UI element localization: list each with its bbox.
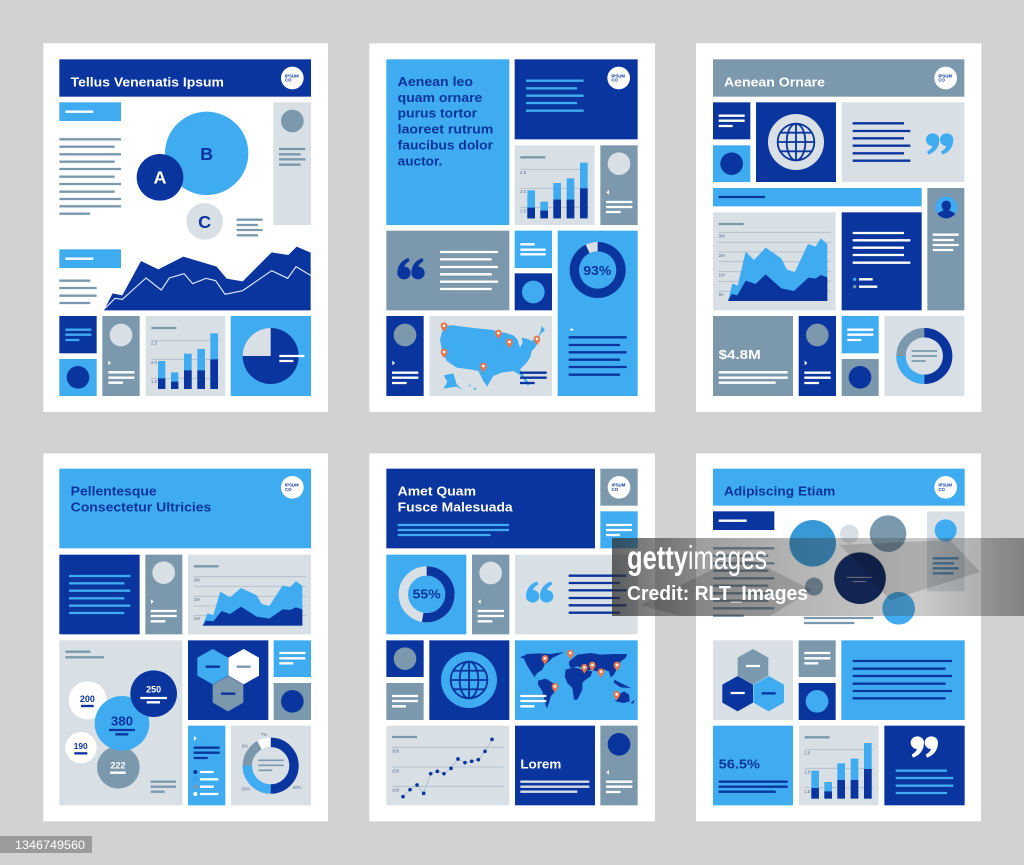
area chart: 3M: [719, 233, 725, 238]
header: CO: [938, 487, 945, 492]
text block: [59, 139, 121, 214]
image id badge: 1346749560: [15, 840, 85, 852]
area chart: [713, 212, 836, 310]
label bar: [713, 511, 774, 530]
bubble chart A B C: C: [198, 212, 211, 232]
headline panel: quam ornare: [398, 90, 482, 105]
bar chart: 1.5: [804, 789, 811, 794]
page 5: Amet Quam: [369, 453, 655, 821]
caption: [59, 281, 97, 303]
bubble chart: 250: [146, 684, 161, 694]
header: [59, 59, 311, 97]
page 1: Tellus Venenatis Ipsum: [43, 43, 328, 412]
bubble chart: [59, 640, 182, 805]
navy text panel with logo: CO: [611, 78, 618, 83]
header: CO: [285, 487, 292, 492]
headline panel: purus tortor: [398, 106, 477, 121]
bubble chart A B C: [137, 112, 248, 240]
donut panel: [884, 316, 964, 396]
note tile: [799, 640, 836, 677]
quote panel: [884, 726, 965, 805]
navy text panel with logo: [515, 59, 638, 139]
bubble chart: 222: [110, 761, 125, 771]
page sheet: [696, 43, 981, 412]
area chart: 1M: [194, 616, 200, 621]
donut panel 55%: 55%: [413, 588, 441, 602]
note tile: [713, 102, 750, 139]
header: Consectetur Ultricies: [71, 500, 211, 515]
header: IPSUM: [285, 483, 299, 488]
Lorem stat card: Lorem: [520, 756, 561, 771]
page sheet: [369, 43, 655, 412]
note tile: [600, 511, 638, 548]
header: IPSUM: [285, 73, 299, 78]
headline panel: Aenean leo: [398, 74, 473, 89]
area chart: 2M: [719, 253, 725, 258]
header: [386, 469, 595, 548]
header: CO: [285, 78, 292, 83]
bar chart: 2.0: [804, 770, 811, 775]
note tile: [386, 683, 424, 720]
label bar: [713, 188, 922, 206]
icon: globe: [756, 102, 836, 182]
dot line chart: [386, 726, 509, 805]
circle tile: [59, 359, 97, 396]
page sheet: [696, 453, 981, 821]
side panel: [927, 511, 965, 591]
header: IPSUM: [938, 73, 952, 78]
header: Tellus Venenatis Ipsum: [71, 75, 224, 90]
text block: [713, 548, 774, 616]
bar chart: [515, 145, 595, 225]
caption: [804, 618, 873, 623]
logo tile: IPSUM: [612, 483, 626, 488]
stat card $4.8M: $4.8M: [719, 347, 761, 362]
donut chart: [231, 726, 311, 805]
profile card: [600, 726, 638, 805]
navy text panel with legend: [842, 212, 922, 310]
header: Aenean Ornare: [724, 75, 825, 90]
page 3: Aenean Ornare: [696, 43, 981, 412]
header: IPSUM: [938, 483, 952, 488]
area chart: [188, 555, 311, 634]
donut chart: 9%: [242, 743, 248, 748]
area chart: [104, 247, 311, 310]
bar chart: 2.5: [804, 750, 811, 755]
page 6: Adipiscing Etiam: [696, 453, 981, 821]
profile card: [102, 316, 140, 396]
page sheet: [43, 453, 328, 821]
hexagon panel: [188, 640, 268, 720]
bar chart: 1.5: [520, 208, 527, 213]
dot line chart: 300: [392, 748, 400, 753]
circle tile: [799, 683, 836, 720]
headline panel: auctor.: [398, 153, 442, 168]
dot line chart: 200: [392, 768, 400, 773]
image id badge: [0, 836, 92, 853]
profile card: [386, 316, 424, 396]
pie chart panel: [231, 316, 311, 396]
bubble chart: 380: [111, 714, 133, 729]
legend card: [188, 726, 225, 805]
page 4: Pellentesque Consectetur Ultricies: [43, 453, 328, 821]
watermark brand light: images: [688, 539, 767, 576]
map of the United States: [440, 325, 545, 390]
bar chart: 1.5: [151, 379, 158, 384]
US map panel: [429, 316, 552, 396]
profile card: [600, 145, 638, 225]
navy text panel: [59, 555, 140, 634]
world map: [520, 652, 635, 709]
icon: globe: [429, 640, 509, 720]
note tile: [274, 640, 311, 677]
page sheet: [43, 43, 328, 412]
label bar: [59, 249, 121, 268]
area chart: 2M: [194, 597, 200, 602]
logo tile: CO: [612, 487, 619, 492]
headline panel: faucibus dolor: [398, 137, 493, 152]
bubble cluster: [789, 515, 915, 625]
header: Fusce Malesuada: [398, 500, 513, 515]
watermark credit: Credit: RLT_Images: [627, 582, 808, 605]
profile card: [145, 555, 182, 634]
donut panel 93%: 93%: [583, 263, 611, 278]
bubble chart: 190: [74, 741, 88, 751]
quote panel: [386, 231, 509, 310]
stat card 56.5%: 56.5%: [719, 756, 760, 771]
page sheet: [369, 453, 655, 821]
bar chart: [799, 726, 879, 805]
world map panel: [515, 640, 638, 720]
logo tile: [600, 469, 638, 506]
profile card: [799, 316, 836, 396]
small caption: [237, 220, 263, 235]
navy note card: [59, 316, 97, 353]
profile panel: [927, 188, 964, 310]
watermark brand bold: getty: [627, 539, 688, 576]
header: [713, 59, 964, 97]
stat card $4.8M: [713, 316, 793, 396]
header: Adipiscing Etiam: [724, 484, 835, 499]
circle tile: [713, 145, 750, 182]
bubble chart: 200: [80, 694, 95, 704]
label bar: [59, 102, 121, 121]
header: Pellentesque: [71, 484, 157, 499]
hexagon panel: [713, 640, 793, 720]
circle tile: [386, 640, 424, 677]
circle tile: [842, 359, 879, 396]
side panel: [273, 102, 311, 225]
page 2: Aenean leo: [369, 43, 655, 412]
circle tile: [515, 273, 552, 310]
donut chart: 20%: [241, 786, 250, 791]
header: [59, 469, 311, 548]
stat card 56.5%: [713, 726, 793, 805]
header: CO: [938, 78, 945, 83]
bar chart: 2.5: [520, 170, 527, 175]
area chart: 3M: [194, 578, 200, 583]
header: [713, 469, 965, 506]
profile card: [472, 555, 509, 634]
watermark band: [612, 520, 1024, 616]
bar chart: 2.0: [520, 189, 527, 194]
donut panel 93%: [558, 231, 638, 396]
donut chart: 7%: [261, 732, 267, 737]
text panel: [841, 640, 965, 720]
note tile: [515, 231, 552, 268]
area chart: 5K: [719, 292, 724, 297]
bar chart: 2.0: [151, 360, 158, 365]
quote panel: [842, 102, 964, 182]
Lorem stat card: [515, 726, 595, 805]
donut panel 55%: [386, 555, 466, 634]
circle tile: [274, 683, 311, 720]
bar chart: [146, 316, 225, 396]
area chart: 1M: [719, 273, 725, 278]
bubble chart A B C: B: [200, 144, 213, 164]
bar chart: 2.5: [151, 341, 158, 346]
bubble chart A B C: A: [153, 168, 166, 188]
headline panel: laoreet rutrum: [398, 122, 493, 137]
header: Amet Quam: [398, 484, 476, 499]
donut chart: 50%: [293, 785, 301, 790]
headline panel: [386, 59, 509, 225]
quote panel: [515, 555, 638, 634]
dot line chart: 100: [392, 788, 400, 793]
note tile: [842, 316, 879, 353]
navy text panel with logo: IPSUM: [611, 73, 625, 78]
